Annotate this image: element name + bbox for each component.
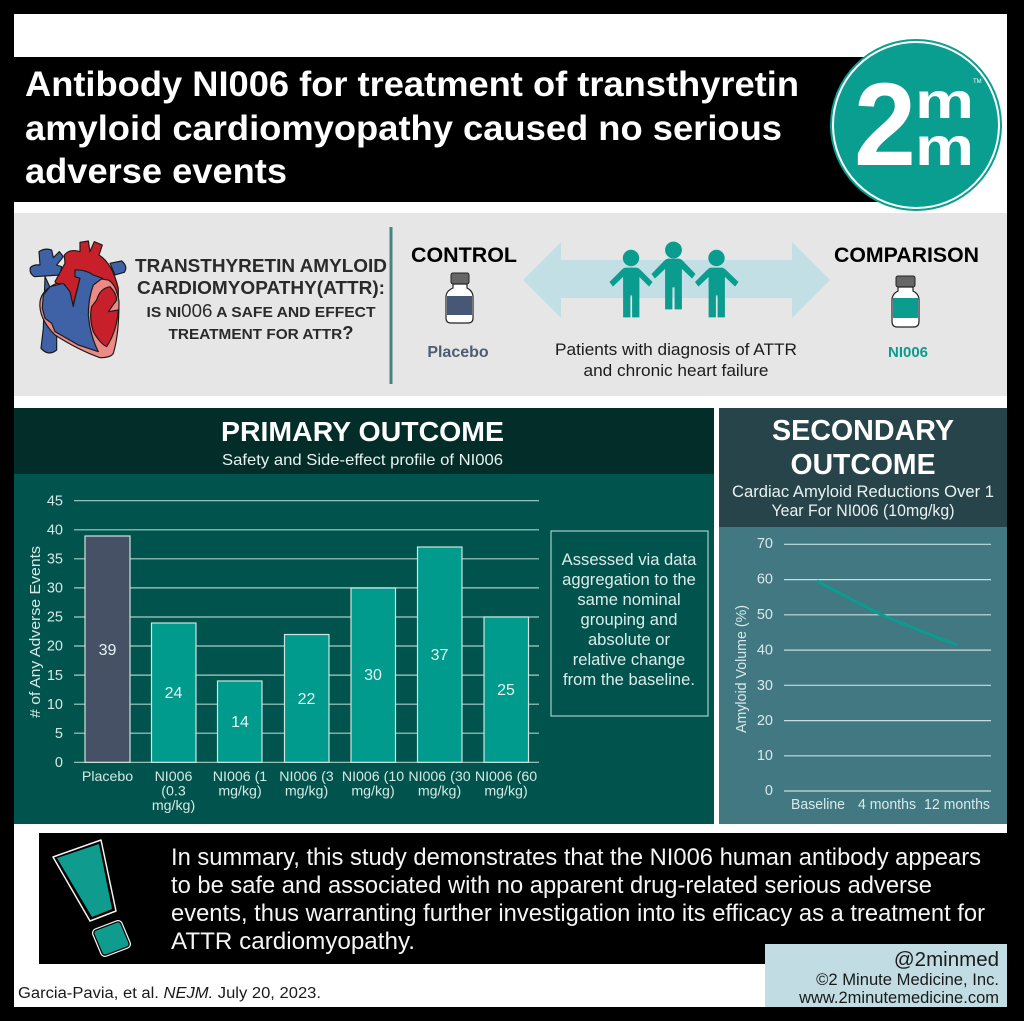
line chart: amyloid volume: 70 — [757, 536, 773, 552]
bar chart: adverse events by dose: Placebo — [82, 769, 133, 785]
icon: patients — [610, 242, 738, 317]
heading: primary outcome: Safety and Side-effect profile of NI006 — [222, 452, 503, 469]
bar chart: adverse events by dose: mg/kg) — [418, 784, 461, 800]
callout: assessment method: absolute or — [588, 630, 671, 649]
callout: assessment method: same nominal — [577, 590, 681, 609]
bar chart: adverse events by dose: NI006 — [155, 769, 193, 785]
line chart: amyloid volume: 0 — [765, 783, 773, 799]
heading: control: CONTROL — [411, 243, 517, 267]
bar chart: adverse events by dose: mg/kg) — [285, 784, 328, 800]
credit box: @2minmed — [894, 948, 999, 971]
heading: primary outcome — [14, 408, 714, 474]
bar chart: adverse events by dose: 5 — [55, 726, 63, 742]
heading: secondary outcome: OUTCOME — [790, 449, 936, 481]
credit box: ©2 Minute Medicine, Inc. — [816, 970, 999, 989]
bar chart: adverse events by dose — [27, 494, 539, 814]
line chart: amyloid volume: 20 — [757, 713, 773, 729]
heading: study question: TRANSTHYRETIN AMYLOID — [135, 255, 387, 276]
panel: secondary outcome — [719, 408, 1007, 824]
panel: summary — [39, 833, 1007, 964]
callout: assessment method: relative change — [573, 650, 685, 669]
line chart: amyloid volume: 50 — [757, 607, 773, 623]
title banner: amyloid cardiomyopathy caused no serious — [25, 108, 782, 148]
text: summary — [171, 844, 985, 955]
heading: study question: TREATMENT FOR ATTR? — [168, 323, 354, 343]
bar chart: adverse events by dose: NI006 (30 — [408, 769, 471, 785]
logo: 2 Minute Medicine — [830, 39, 1002, 211]
bar chart: adverse events by dose: mg/kg) — [351, 784, 395, 800]
bar chart: adverse events by dose: 20 — [47, 638, 63, 654]
callout: assessment method — [551, 531, 708, 716]
bar chart: adverse events by dose: NI006 (3 — [279, 769, 334, 785]
bar chart: adverse events by dose: 35 — [47, 552, 63, 568]
bar chart: adverse events by dose: (0.3 — [161, 784, 186, 800]
logo: 2 Minute Medicine: m — [915, 117, 974, 177]
text: summary: ATTR cardiomyopathy. — [171, 928, 415, 955]
bar chart: adverse events by dose: 14 — [231, 714, 249, 731]
label: NI006: NI006 — [888, 344, 928, 361]
heading: study question: CARDIOMYOPATHY(ATTR): — [137, 277, 385, 298]
line chart: amyloid volume: 30 — [757, 678, 773, 694]
bar chart: adverse events by dose: NI006 (1 — [213, 769, 267, 785]
heading: secondary outcome: Cardiac Amyloid Reductions Over 1 — [732, 483, 994, 501]
title banner: adverse events — [25, 151, 287, 191]
bar chart: adverse events by dose: mg/kg) — [218, 784, 262, 800]
icon: placebo bottle — [446, 273, 473, 323]
text: summary: to be safe and associated with no apparent drug-related serious adverse — [171, 872, 932, 899]
text: patient population: and chronic heart failure — [584, 362, 768, 380]
heading: secondary outcome: SECONDARY — [772, 415, 954, 447]
bar chart: adverse events by dose: 37 — [431, 647, 448, 664]
panel: primary outcome — [14, 408, 714, 824]
title banner — [14, 57, 894, 202]
credit box — [765, 944, 1007, 1007]
line chart: amyloid volume: Baseline — [791, 797, 845, 813]
panel: study design — [14, 213, 1007, 396]
bar chart: adverse events by dose: 25 — [497, 682, 515, 699]
text: patient population: Patients with diagnosis of ATTR — [555, 341, 797, 359]
credit box: www.2minutemedicine.com — [798, 989, 999, 1007]
callout: assessment method: Assessed via data — [562, 550, 697, 569]
bar chart: adverse events by dose: mg/kg) — [484, 784, 528, 800]
bar chart: adverse events by dose: 22 — [298, 691, 316, 708]
icon: heart — [30, 241, 126, 358]
line chart: amyloid volume: 4 months — [858, 797, 916, 813]
logo: 2 Minute Medicine: 2 — [854, 59, 916, 191]
citation: Garcia-Pavia, et al. NEJM. July 20, 2023. — [18, 985, 321, 1002]
icon: exclamation mark — [53, 840, 126, 952]
heading: comparison: COMPARISON — [834, 243, 979, 267]
bar chart: adverse events by dose: 45 — [47, 494, 63, 510]
bar chart: adverse events by dose: 39 — [99, 642, 116, 659]
line chart: amyloid volume: 60 — [757, 572, 773, 588]
logo: 2 Minute Medicine: m — [915, 73, 974, 129]
line chart: amyloid volume — [734, 536, 991, 813]
callout: assessment method: aggregation to the — [562, 570, 696, 589]
text: summary: events, thus warranting further investigation into its efficacy as a treatment for — [171, 900, 985, 927]
text: summary: In summary, this study demonstrates that the NI006 human antibody appears — [171, 844, 981, 871]
bar chart: adverse events by dose: # of Any Adverse Events — [27, 546, 44, 718]
arrow: double-headed comparison — [523, 242, 830, 318]
callout: assessment method: from the baseline. — [563, 670, 695, 689]
bar chart: adverse events by dose: NI006 (10 — [342, 769, 404, 785]
bar chart: adverse events by dose: 10 — [47, 697, 63, 713]
bar chart: adverse events by dose: NI006 (60 — [475, 769, 537, 785]
bar chart: adverse events by dose: 30 — [364, 667, 382, 684]
heading: study question — [135, 255, 387, 343]
bar chart: adverse events by dose: 15 — [47, 668, 63, 684]
heading: secondary outcome — [719, 408, 1007, 527]
heading: study question: IS NI006 A SAFE AND EFFECT — [146, 301, 376, 321]
line chart: amyloid volume: 40 — [757, 642, 773, 658]
bar chart: adverse events by dose: mg/kg) — [152, 798, 195, 814]
bar chart: adverse events by dose: 40 — [47, 522, 63, 538]
icon: NI006 bottle — [892, 276, 919, 327]
bar chart: adverse events by dose: 24 — [165, 685, 182, 702]
label: placebo: Placebo — [427, 344, 489, 361]
heading: primary outcome: PRIMARY OUTCOME — [221, 416, 504, 447]
bar chart: adverse events by dose: 25 — [47, 610, 63, 626]
line chart: amyloid volume: Amyloid Volume (%) — [734, 605, 750, 733]
callout: assessment method: grouping and — [581, 610, 677, 629]
heading: secondary outcome: Year For NI006 (10mg/kg) — [772, 502, 954, 520]
line chart: amyloid volume: 12 months — [924, 797, 990, 813]
bar chart: adverse events by dose: 0 — [55, 755, 63, 771]
text: patient population — [555, 341, 797, 380]
line chart: amyloid volume: 10 — [757, 748, 773, 764]
title banner: Antibody NI006 for treatment of transthyretin — [25, 64, 799, 104]
bar chart: adverse events by dose: 30 — [47, 580, 63, 596]
logo: 2 Minute Medicine: TM — [973, 79, 982, 85]
